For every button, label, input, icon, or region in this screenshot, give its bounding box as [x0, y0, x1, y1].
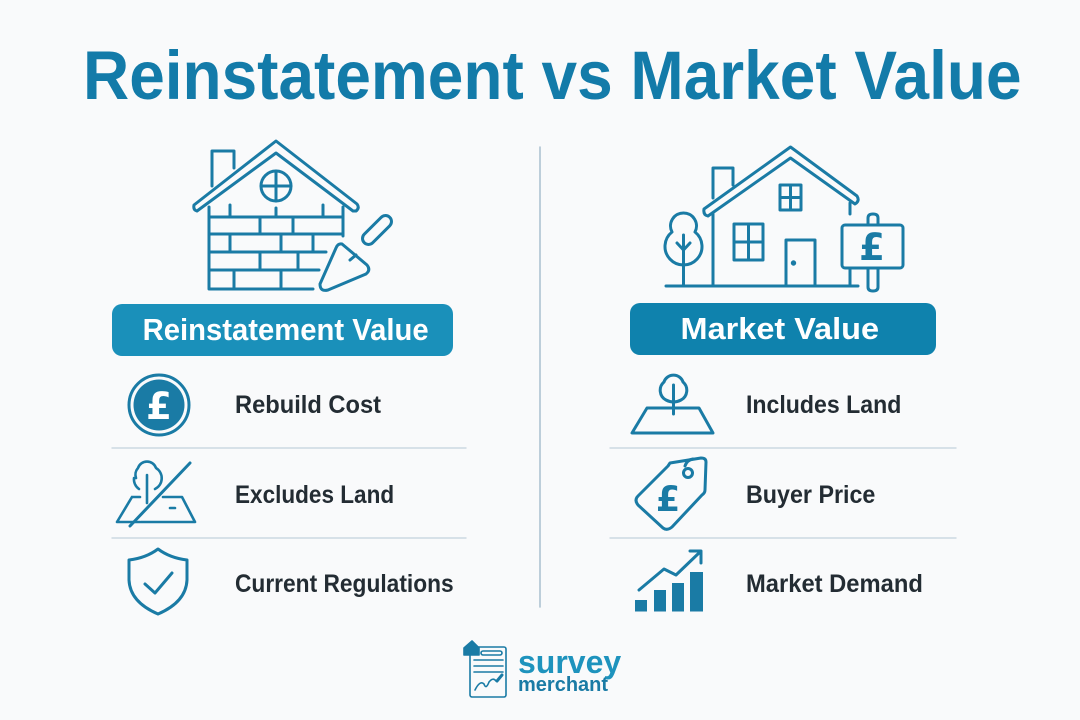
icon: growth chart — [635, 551, 703, 612]
icon: land crossed out — [117, 462, 195, 526]
panel: market value heading — [630, 303, 936, 355]
icon: house with tree and sale sign — [665, 147, 903, 291]
text: includes land: Includes Land — [746, 391, 901, 419]
text: rebuild cost: Rebuild Cost — [235, 391, 381, 419]
panel: market value heading: Market Value — [681, 311, 879, 346]
icon: land with tree — [632, 375, 713, 433]
logo: survey merchant icon — [464, 641, 506, 697]
logo: merchant wordmark: merchant — [518, 674, 608, 696]
icon: pound coin: £ — [146, 385, 172, 428]
title: Reinstatement vs Market Value — [83, 37, 1022, 114]
text: excludes land: Excludes Land — [235, 481, 394, 509]
icon: house with tree and sale sign: £ — [859, 226, 885, 269]
icon: shield with check — [129, 549, 187, 614]
text: current regulations: Current Regulations — [235, 570, 454, 598]
icon: price tag: £ — [656, 480, 680, 520]
text: market demand: Market Demand — [746, 570, 923, 598]
icon: pound coin — [129, 375, 189, 435]
panel: reinstatement value heading — [112, 304, 453, 356]
icon: brick house with trowel — [194, 141, 394, 290]
logo: survey wordmark: survey — [518, 644, 621, 680]
panel: reinstatement value heading: Reinstatement Value — [143, 312, 428, 347]
text: buyer price: Buyer Price — [746, 481, 875, 509]
icon: price tag — [636, 458, 706, 529]
